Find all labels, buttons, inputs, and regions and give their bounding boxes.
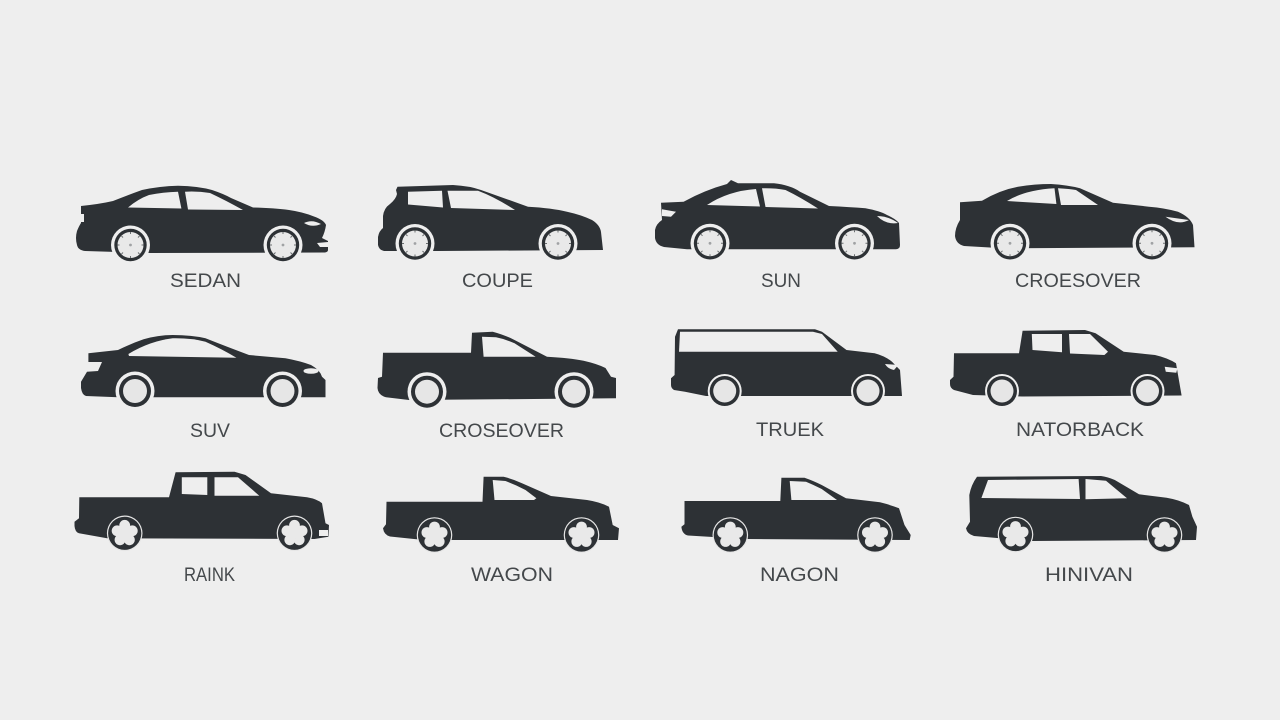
coupe wheels bbox=[396, 224, 578, 263]
label: CROSEOVER: CROSEOVER bbox=[439, 421, 564, 442]
car: single cab pickup labelled wagon bbox=[383, 477, 619, 586]
CROESOVER wheels bbox=[990, 224, 1172, 263]
RAINK wheels bbox=[107, 516, 312, 551]
CROSEOVER body bbox=[378, 332, 616, 400]
car: double cab pickup bbox=[950, 330, 1182, 441]
CROSEOVER window bbox=[482, 337, 536, 357]
HINIVAN body bbox=[966, 476, 1197, 541]
TRUEK headlight bbox=[885, 364, 898, 370]
car: SUV labelled coupe shape bbox=[81, 335, 326, 442]
WAGON body bbox=[383, 477, 619, 540]
CROESOVER windows and light bbox=[1007, 188, 1189, 222]
WAGON wheels bbox=[417, 517, 599, 553]
label: NAGON: NAGON bbox=[760, 565, 839, 586]
label: COUPE: COUPE bbox=[462, 271, 533, 292]
car: SUV labelled SUN bbox=[655, 180, 900, 292]
HINIVAN windows bbox=[981, 479, 1127, 499]
SUV window bbox=[128, 338, 236, 358]
label: SUV: SUV bbox=[190, 421, 230, 442]
CROESOVER body bbox=[955, 184, 1194, 248]
TRUEK wheels bbox=[708, 374, 885, 408]
car: crossover pickup bbox=[378, 332, 616, 442]
SUN body bbox=[655, 180, 900, 249]
sedan lights bbox=[81, 214, 328, 247]
NATORBACK windows and light bbox=[1032, 334, 1177, 373]
NAGON body bbox=[681, 478, 911, 540]
SUV body bbox=[81, 335, 326, 397]
label: SUN: SUN bbox=[761, 271, 801, 292]
car: crossover saloon bbox=[955, 184, 1194, 292]
car: single cab pickup labelled nagon bbox=[681, 478, 911, 586]
coupe windows bbox=[408, 191, 515, 210]
sedan windows bbox=[128, 192, 243, 210]
car: van labelled truck bbox=[671, 329, 902, 441]
sedan body bbox=[76, 186, 328, 253]
car: sedan bbox=[76, 186, 328, 292]
SUN windows and lights bbox=[662, 188, 898, 223]
label: TRUEK: TRUEK bbox=[756, 420, 824, 441]
coupe body bbox=[378, 185, 603, 251]
TRUEK window bbox=[679, 332, 838, 352]
label: HINIVAN: HINIVAN bbox=[1045, 565, 1133, 586]
NAGON wheels bbox=[712, 517, 893, 553]
car: coupe bbox=[378, 185, 603, 292]
NAGON window bbox=[790, 481, 837, 500]
car: large pickup bbox=[74, 472, 329, 586]
NATORBACK body bbox=[950, 330, 1182, 396]
RAINK windows and light bbox=[182, 477, 328, 536]
car: minivan bbox=[966, 476, 1197, 586]
label: CROESOVER: CROESOVER bbox=[1015, 271, 1141, 292]
label: NATORBACK: NATORBACK bbox=[1016, 420, 1144, 441]
CROSEOVER wheels bbox=[408, 372, 594, 411]
SUV headlight bbox=[304, 368, 318, 374]
sedan wheels bbox=[111, 226, 302, 264]
label: WAGON: WAGON bbox=[471, 565, 553, 586]
RAINK body bbox=[74, 472, 329, 539]
WAGON window bbox=[493, 480, 536, 500]
label: RAINK: RAINK bbox=[184, 565, 235, 586]
SUV wheels bbox=[116, 372, 302, 410]
label: SEDAN: SEDAN bbox=[170, 271, 241, 292]
TRUEK body bbox=[671, 329, 902, 396]
HINIVAN wheels bbox=[998, 517, 1182, 553]
SUN wheels bbox=[690, 224, 874, 263]
NATORBACK wheels bbox=[985, 374, 1164, 408]
